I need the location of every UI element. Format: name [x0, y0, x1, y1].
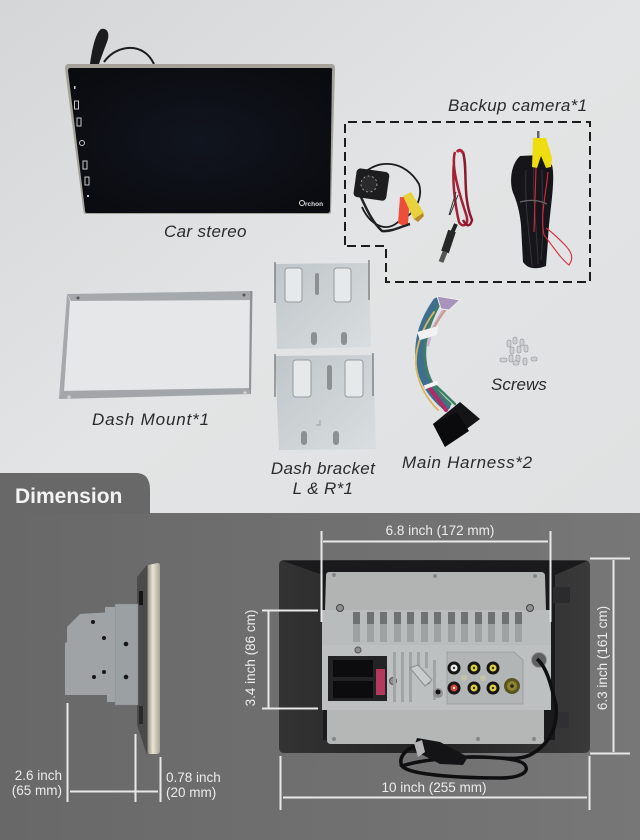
label: screws: Screws — [491, 375, 547, 394]
heading tab: dimension — [0, 473, 150, 514]
side view of stereo — [65, 563, 160, 755]
label: backup camera: Backup camera*1 — [448, 96, 587, 115]
car stereo photo — [65, 29, 335, 214]
video cable photo — [511, 131, 572, 268]
RCA jacks — [447, 652, 523, 704]
car stereo photo: rchon — [305, 201, 323, 208]
backup camera photo — [353, 164, 424, 231]
label: 0.78 inch: 0.78 inch — [166, 770, 221, 785]
rear view of stereo — [279, 560, 590, 778]
heat sink — [322, 610, 551, 645]
dashed outline: backup camera kit — [345, 122, 590, 282]
depth dimension lines — [68, 703, 160, 802]
label: 2.6 inch: (65 mm) — [12, 783, 62, 798]
dash bracket lower photo — [275, 353, 376, 450]
power cable photo — [441, 150, 472, 262]
label: 3.4 inch: 3.4 inch (86 cm) — [243, 610, 258, 706]
screws photo — [500, 337, 537, 365]
vents — [393, 652, 436, 702]
label: dash mount: Dash Mount*1 — [92, 410, 210, 429]
ISO connector — [328, 656, 387, 701]
label: 10 inch: 10 inch (255 mm) — [381, 780, 487, 795]
label: 2.6 inch: 2.6 inch — [15, 768, 62, 783]
heading tab: dimension: Dimension — [15, 485, 122, 508]
label: 0.78 inch: (20 mm) — [166, 785, 216, 800]
rear view dimension lines — [262, 531, 630, 810]
label: 6.8 inch: 6.8 inch (172 mm) — [386, 523, 494, 538]
dash bracket upper photo — [275, 260, 371, 349]
label: 0.78 inch — [166, 770, 221, 800]
background: product photo area — [0, 0, 640, 514]
label: dash bracket — [271, 459, 376, 498]
panel: dimension — [0, 513, 640, 840]
bezel — [279, 560, 590, 753]
dash mount frame photo — [59, 291, 252, 399]
label: main harness: Main Harness*2 — [402, 453, 533, 472]
main harness photo — [416, 296, 480, 447]
label: dash bracket: L & R*1 — [293, 479, 353, 498]
label: 6.3 inch: 6.3 inch (161 cm) — [595, 606, 610, 710]
label: car stereo: Car stereo — [164, 222, 247, 241]
label: 2.6 inch — [12, 768, 62, 798]
label: dash bracket: Dash bracket — [271, 459, 376, 478]
lower plate — [327, 710, 544, 744]
connector plate — [322, 645, 551, 710]
USB cable — [532, 652, 546, 668]
top plate — [325, 572, 546, 610]
